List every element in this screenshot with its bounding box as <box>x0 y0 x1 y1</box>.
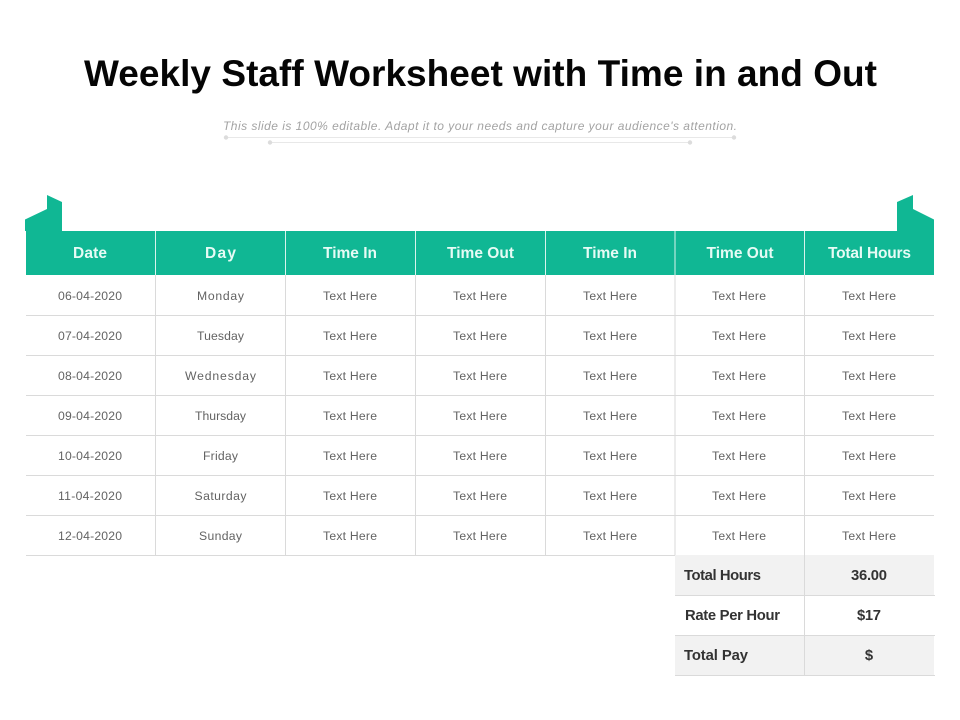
row: 06-04-2020: Text Here <box>712 289 766 303</box>
row: 07-04-2020: Text Here <box>453 329 507 343</box>
summary: rate per hour: $17 <box>857 608 881 624</box>
row: 06-04-2020: Text Here <box>453 289 507 303</box>
subtitle: This slide is 100% editable. Adapt it to your needs and capture your audience's attention. <box>223 119 737 133</box>
table header band with ribbon tabs <box>25 195 934 275</box>
row: 12-04-2020: 12-04-2020 <box>58 529 122 543</box>
row: 09-04-2020: Text Here <box>712 409 766 423</box>
row: 10-04-2020: Text Here <box>323 449 377 463</box>
row: 06-04-2020: Monday <box>197 289 245 303</box>
row: 10-04-2020: Text Here <box>842 449 896 463</box>
row: 11-04-2020: Saturday <box>194 489 247 503</box>
summary: total hours: 36.00 <box>851 568 887 584</box>
row: 11-04-2020: Text Here <box>712 489 766 503</box>
row: 09-04-2020: Text Here <box>323 409 377 423</box>
row: 11-04-2020: 11-04-2020 <box>58 489 122 503</box>
row: 06-04-2020 <box>58 289 896 303</box>
row: 08-04-2020: Wednesday <box>185 369 257 383</box>
row: 09-04-2020: Text Here <box>842 409 896 423</box>
row: 07-04-2020: Text Here <box>712 329 766 343</box>
summary: total pay <box>684 648 874 664</box>
row: 08-04-2020: 08-04-2020 <box>58 369 122 383</box>
row: 08-04-2020: Text Here <box>842 369 896 383</box>
summary: rate per hour: Rate Per Hour <box>685 608 780 624</box>
row: 07-04-2020: Tuesday <box>197 329 245 343</box>
table header labels: Time Out <box>706 245 774 262</box>
summary table <box>675 555 935 676</box>
row: 08-04-2020: Text Here <box>712 369 766 383</box>
row: 12-04-2020: Text Here <box>323 529 377 543</box>
row: 07-04-2020: Text Here <box>583 329 637 343</box>
table header labels: Time In <box>323 245 377 262</box>
row: 10-04-2020: Text Here <box>453 449 507 463</box>
row: 09-04-2020: Text Here <box>583 409 637 423</box>
table header labels <box>73 231 911 275</box>
row: 07-04-2020: Text Here <box>323 329 377 343</box>
summary: rate per hour <box>685 608 881 624</box>
row: 11-04-2020 <box>58 489 896 503</box>
row: 11-04-2020: Text Here <box>453 489 507 503</box>
subtitle decorative lines <box>224 135 736 145</box>
row: 12-04-2020: Text Here <box>453 529 507 543</box>
summary: total pay: $ <box>865 648 874 664</box>
row: 12-04-2020: Sunday <box>199 529 243 543</box>
title: Weekly Staff Worksheet with Time in and Out <box>84 53 877 94</box>
row: 08-04-2020: Text Here <box>583 369 637 383</box>
row: 11-04-2020: Text Here <box>323 489 377 503</box>
table header labels: Time In <box>583 245 637 262</box>
row: 09-04-2020: Text Here <box>453 409 507 423</box>
row: 08-04-2020: Text Here <box>323 369 377 383</box>
summary: total pay: Total Pay <box>684 648 749 664</box>
row: 09-04-2020: 09-04-2020 <box>58 409 122 423</box>
row: 10-04-2020: Text Here <box>712 449 766 463</box>
table header labels: Date <box>73 245 107 262</box>
row: 07-04-2020: Text Here <box>842 329 896 343</box>
row: 06-04-2020: Text Here <box>583 289 637 303</box>
row: 11-04-2020: Text Here <box>842 489 896 503</box>
row: 10-04-2020: Text Here <box>583 449 637 463</box>
table grid lines <box>26 275 934 556</box>
row: 08-04-2020 <box>58 369 896 383</box>
row: 12-04-2020: Text Here <box>712 529 766 543</box>
summary: total hours: Total Hours <box>684 568 761 584</box>
row: 07-04-2020: 07-04-2020 <box>58 329 122 343</box>
row: 06-04-2020: Text Here <box>842 289 896 303</box>
row: 12-04-2020: Text Here <box>842 529 896 543</box>
row: 10-04-2020: 10-04-2020 <box>58 449 122 463</box>
row: 12-04-2020 <box>58 529 896 543</box>
row: 11-04-2020: Text Here <box>583 489 637 503</box>
summary: total hours <box>684 568 887 584</box>
row: 06-04-2020: Text Here <box>323 289 377 303</box>
table header labels: Total Hours <box>828 245 911 262</box>
row: 06-04-2020: 06-04-2020 <box>58 289 122 303</box>
row: 09-04-2020: Thursday <box>195 409 247 423</box>
row: 07-04-2020 <box>58 329 896 343</box>
row: 10-04-2020 <box>58 449 896 463</box>
row: 10-04-2020: Friday <box>203 449 239 463</box>
table header labels: Time Out <box>447 245 514 262</box>
row: 09-04-2020 <box>58 409 896 423</box>
table header labels: Day <box>205 245 236 262</box>
row: 12-04-2020: Text Here <box>583 529 637 543</box>
row: 08-04-2020: Text Here <box>453 369 507 383</box>
